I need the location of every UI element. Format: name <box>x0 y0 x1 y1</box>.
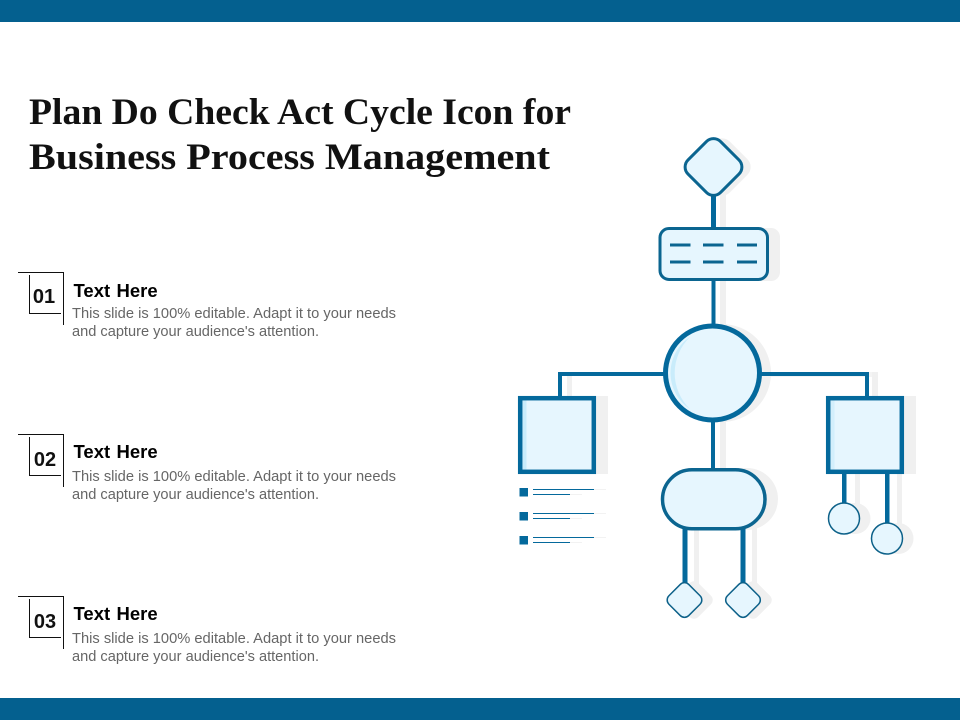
rounded pill node <box>662 470 765 529</box>
top diamond <box>681 134 746 200</box>
central circle <box>666 326 760 420</box>
small diamond left <box>665 580 704 620</box>
flowchart shadow <box>567 134 916 621</box>
item 01 <box>18 272 396 340</box>
body text 02 <box>72 469 396 503</box>
dashed process box <box>660 228 768 280</box>
small circle left <box>828 503 860 534</box>
body text 03: and capture your audience's attention. <box>72 649 319 665</box>
flowchart icon <box>520 134 916 621</box>
heading 02: Here <box>116 441 158 462</box>
heading 01 <box>74 280 158 301</box>
number badge 02 <box>18 434 64 487</box>
body text 02: This slide is 100% editable. Adapt it to your needs <box>72 469 396 485</box>
number badge 03: 03 <box>34 611 56 633</box>
top band <box>0 0 960 22</box>
title: Plan Do Check Act Cycle Icon for <box>29 92 571 133</box>
item 02 <box>18 434 396 503</box>
body text 02: and capture your audience's attention. <box>72 487 319 503</box>
small circle right <box>872 523 902 554</box>
bottom band <box>0 698 960 720</box>
small diamond right <box>723 580 763 620</box>
number badge 01: 01 <box>33 286 55 308</box>
bullet list <box>520 488 606 544</box>
heading 01: Here <box>116 280 158 301</box>
item 03 <box>18 596 396 665</box>
title: Business Process Management <box>29 137 551 178</box>
body text 01: This slide is 100% editable. Adapt it to your needs <box>72 306 396 322</box>
connector lines <box>558 195 890 584</box>
left square <box>520 398 594 472</box>
body text 03 <box>72 631 396 665</box>
heading 02: Text <box>74 441 110 462</box>
body text 03: This slide is 100% editable. Adapt it to your needs <box>72 631 396 647</box>
heading 01: Text <box>74 280 110 301</box>
heading 02 <box>74 441 158 462</box>
number badge 03 <box>18 596 64 649</box>
heading 03 <box>74 603 158 624</box>
number badge 01 <box>18 272 64 325</box>
heading 03: Text <box>74 603 110 624</box>
body text 01: and capture your audience's attention. <box>72 324 319 340</box>
right square <box>828 398 902 472</box>
heading 03: Here <box>116 603 158 624</box>
number badge 02: 02 <box>34 449 56 471</box>
title <box>29 92 571 178</box>
body text 01 <box>72 306 396 340</box>
